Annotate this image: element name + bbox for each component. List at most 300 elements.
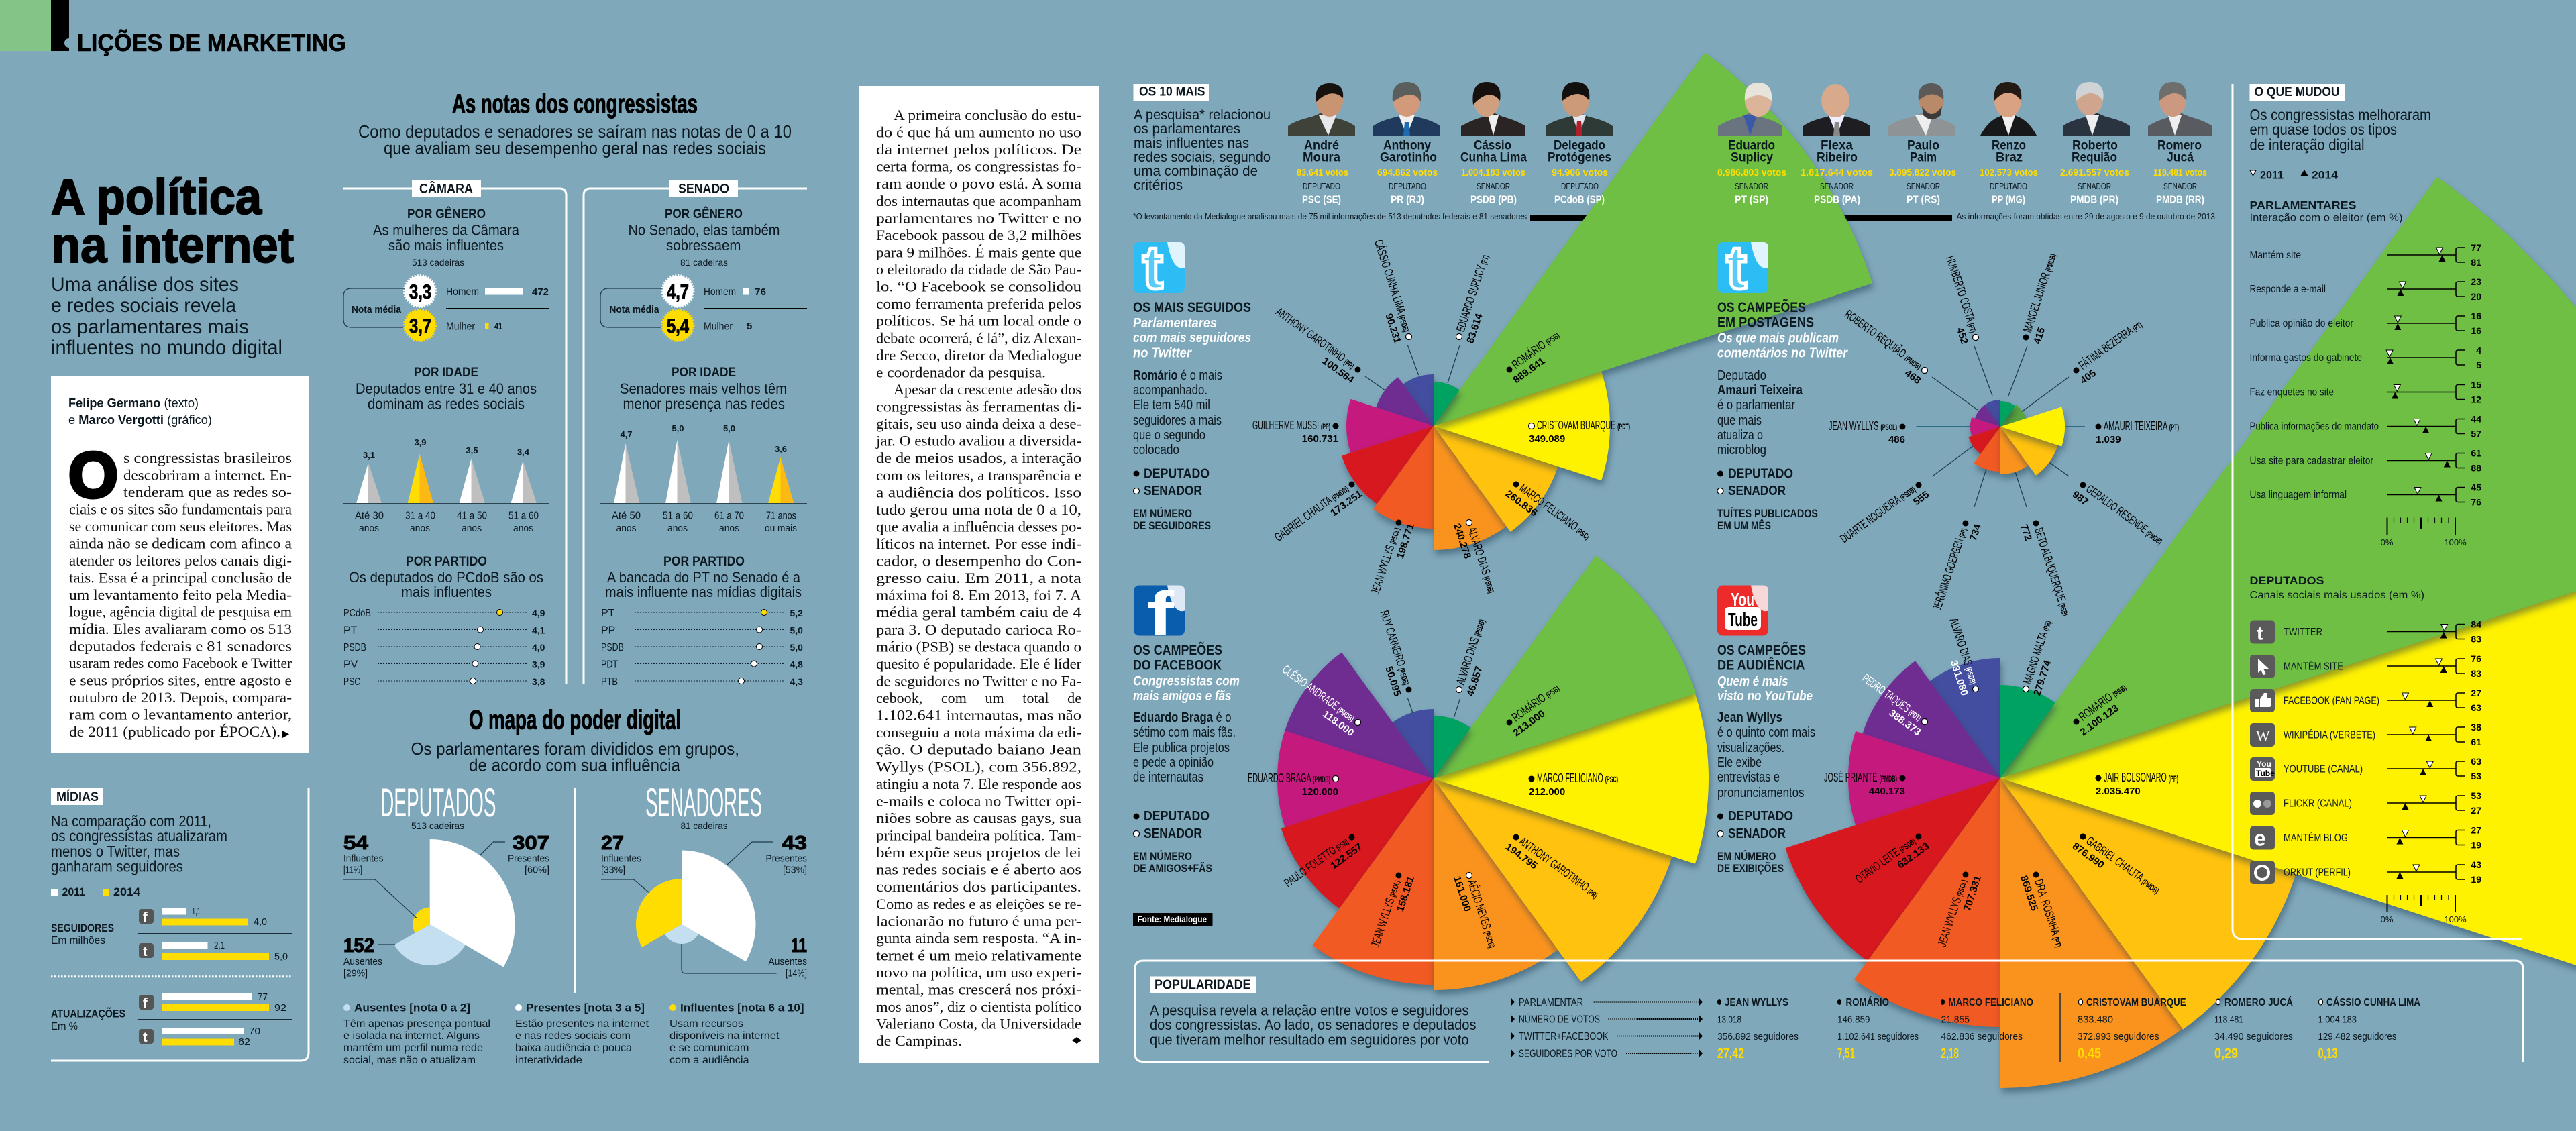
- photo: Flexa Ribeiro: [1803, 84, 1870, 136]
- triangle chart senado: 5,0: [672, 423, 684, 433]
- panel: body text column: cador, o desempenho do Con-: [876, 553, 1081, 570]
- pie labels: campeoes do facebook: ROMÁRIO (PSB): [1509, 681, 1562, 724]
- pie labels: campeoes de audiencia: 632.133: [1895, 841, 1931, 871]
- triangle chart camara: anos: [410, 523, 430, 534]
- range chart deputados: 83: [2471, 668, 2481, 679]
- description seguidos: acompanhado.: [1133, 383, 1208, 398]
- labels deputados: [60%]: [525, 864, 549, 876]
- pie labels: campeoes de audiencia: PEDRO TAQUES (PDT): [1860, 671, 1925, 724]
- name: Romero Juca: [2153, 138, 2207, 206]
- legend o que mudou: 2014: [2312, 169, 2339, 181]
- pie labels: campeoes de audiencia: 876.990: [2070, 841, 2106, 871]
- panel: body text column: mário (PSB) se destaca quando o: [876, 638, 1081, 655]
- triangle chart senado: 71 anos: [766, 510, 796, 522]
- heading deputados: Canais sociais mais usados (em %): [2250, 590, 2424, 601]
- panel: body text column: máxima foi 8. Em 2013, foi 7. A: [876, 587, 1081, 604]
- dot rows camara: PCdoB: [343, 608, 371, 619]
- table col: Jean Wyllys: 27,42: [1717, 1046, 1744, 1061]
- por genero camara: [343, 207, 549, 341]
- panel: body text column: da internet pelos políticos. De: [876, 141, 1081, 158]
- por genero camara: 513 cadeiras: [412, 257, 464, 268]
- table col: Cristovam Buarque: 372.993 seguidores: [2078, 1031, 2159, 1042]
- dot rows camara: PSC: [343, 676, 360, 688]
- por idade senado: menor presença nas redes: [623, 396, 785, 412]
- bar chart atualizacoes: Em %: [51, 1021, 78, 1032]
- legend facebook: DEPUTADO: [1144, 809, 1210, 824]
- por genero camara: 3,7: [409, 315, 431, 337]
- triangle chart senado: 5,0: [723, 423, 735, 433]
- name: Anthony Garotinho: PR (RJ): [1391, 195, 1424, 206]
- table col: Cristovam Buarque: 0,45: [2078, 1046, 2101, 1061]
- body text: ciais e os sites são fundamentais para: [69, 500, 292, 518]
- midias text: menos o Twitter, mas: [51, 843, 180, 860]
- pie labels: campeoes do facebook: 194.795: [1503, 841, 1540, 871]
- pie labels: os mais seguidos: 240.278: [1451, 522, 1473, 560]
- name: Roberto Requiao: Requião: [2072, 150, 2117, 165]
- bar chart seguidores: 1,1: [192, 906, 201, 917]
- dot rows camara: PV: [343, 659, 358, 671]
- pie senadores: [636, 851, 755, 961]
- triangle chart camara: anos: [359, 523, 379, 534]
- labels senadores: 11: [791, 935, 807, 957]
- labels deputados: Influentes: [343, 853, 384, 864]
- table col: Cassio Cunha Lima: 0,13: [2318, 1046, 2337, 1061]
- description seguidos: Ele tem 540 mil: [1133, 398, 1210, 413]
- por partido camara: POR PARTIDO: [406, 555, 487, 569]
- triangle chart camara: 51 a 60: [508, 510, 539, 522]
- name: Delegado Protogenes: [1548, 138, 1611, 206]
- panel: body text column: Apesar da crescente adesão dos: [894, 381, 1081, 398]
- triangle chart camara: 41 a 50: [457, 510, 487, 522]
- triangle chart senado: anos: [616, 523, 636, 534]
- panel: senado: [584, 180, 807, 688]
- table col: Cassio Cunha Lima: [2318, 995, 2420, 1061]
- pie labels: campeoes em postagens: 486: [1888, 434, 1905, 445]
- pie labels: os mais seguidos: CÁSSIO CUNHA LIMA (PSDB): [1372, 238, 1414, 333]
- pie labels: campeoes de audiencia: JAIR BOLSONARO (PP): [2104, 771, 2178, 784]
- heading postagens: [1717, 299, 1814, 330]
- dot rows senado: PDT: [601, 659, 618, 671]
- table col: Cristovam Buarque: CRISTOVAM BUARQUE: [2086, 997, 2186, 1008]
- description postagens: microblog: [1717, 443, 1766, 457]
- intro os 10 mais: mais influentes nas: [1134, 136, 1249, 151]
- pie labels: os mais seguidos: MARCO FELICIANO (PSC): [1517, 482, 1593, 542]
- legend audiencia: DEPUTADO: [1728, 809, 1793, 824]
- range chart deputados: 53: [2471, 790, 2481, 801]
- panel: body text column: comentários dos participantes.: [876, 878, 1081, 895]
- pie labels: campeoes do facebook: ANTHONY GAROTINHO (PR): [1517, 834, 1601, 901]
- pie labels: campeoes de audiencia: 388.373: [1886, 708, 1923, 738]
- pie labels: campeoes do facebook: 118.000: [1320, 708, 1356, 739]
- panel: body text column: mos anos”, diz o cientista político: [876, 998, 1081, 1015]
- range chart parlamentares: Responde a e-mail: [2250, 284, 2326, 295]
- panel: body text column: de de meios usados, a interação: [876, 449, 1081, 466]
- panel text: campeoes em postagens: [1717, 233, 1848, 532]
- pie labels: campeoes em postagens: 1.039: [2096, 434, 2121, 445]
- por genero senado: Nota média: [609, 304, 659, 315]
- pie labels: os mais seguidos: 160.731: [1302, 433, 1338, 445]
- name: Renzo Braz: PP (MG): [1992, 195, 2025, 206]
- legend: presentes: baixa audiência e pouca: [515, 1042, 632, 1054]
- por partido camara: [343, 555, 545, 688]
- subtitle: os parlamentares mais: [51, 316, 249, 338]
- legend: influentes: disponíveis na internet: [669, 1030, 780, 1042]
- o que mudou text: em quase todos os tipos: [2250, 121, 2397, 138]
- triangle chart camara: 3,5: [466, 445, 478, 455]
- footnote: As informações foram obtidas entre 29 de agosto e 9 de outubro de 2013: [1956, 211, 2215, 221]
- name: Renzo Braz: DEPUTADO: [1990, 181, 2027, 191]
- description postagens: [1717, 368, 1803, 457]
- panel: body text column: gunta ainda sem resposta. “A in-: [876, 930, 1081, 947]
- pie labels: os mais seguidos: [1252, 238, 1630, 600]
- range chart deputados: 19: [2471, 840, 2481, 851]
- heading: as notas dos congressistas: que avaliam seu desempenho geral nas redes sociais: [384, 138, 766, 158]
- subtitle facebook: Congressistas com: [1133, 674, 1240, 688]
- description facebook: sétimo com mais fãs.: [1133, 725, 1236, 740]
- bar chart atualizacoes: 92: [274, 1002, 286, 1014]
- por partido senado: A bancada do PT no Senado é a: [607, 569, 801, 586]
- subtitle facebook: [1133, 674, 1240, 704]
- heading: o mapa do poder digital: O mapa do poder digital: [469, 706, 681, 735]
- range chart parlamentares: Mantém site: [2250, 250, 2301, 261]
- pie labels: campeoes em postagens: 452: [1954, 326, 1970, 345]
- legend seguidos: DE SEGUIDORES: [1133, 519, 1211, 532]
- por genero camara: Nota média: [352, 304, 402, 315]
- legend audiencia: [1717, 809, 1793, 875]
- panel: body text column: dre Secco, diretor da Medialogue: [876, 347, 1081, 364]
- pie labels: campeoes do facebook: ALVARO DIAS (PSDB): [1454, 617, 1488, 686]
- por genero senado: No Senado, elas também: [628, 221, 780, 239]
- bar chart atualizacoes: 77: [258, 991, 268, 1003]
- tag o que mudou: O QUE MUDOU: [2254, 85, 2340, 99]
- panel: body text column: bém expõe seus projetos de lei: [876, 844, 1081, 861]
- body text: um levantamento feito pela Media-: [69, 586, 292, 603]
- range chart parlamentares: Publica opinião do eleitor: [2250, 318, 2354, 329]
- bar chart seguidores: f: [143, 910, 148, 925]
- intro os 10 mais: redes sociais, segundo: [1134, 150, 1271, 165]
- body text: logue, agência digital de pesquisa em: [69, 604, 292, 620]
- intro os 10 mais: [1134, 107, 1271, 193]
- por genero camara: são mais influentes: [388, 237, 504, 254]
- heading facebook: [1133, 642, 1222, 674]
- triangle chart senado: 4,7: [620, 429, 633, 439]
- pie labels: campeoes do facebook: 161.000: [1451, 875, 1473, 913]
- pie labels: campeoes do facebook: [1248, 609, 1618, 953]
- icon: facebook: f: [1147, 580, 1174, 648]
- pie labels: os mais seguidos: 90.231: [1383, 312, 1403, 345]
- labels deputados: [11%]: [343, 864, 362, 876]
- por genero camara: 3,3: [409, 281, 431, 303]
- dot rows senado: 5,2: [790, 608, 803, 618]
- triangle chart senado: [600, 423, 807, 534]
- photo: Anthony Garotinho: [1373, 82, 1440, 136]
- o que mudou text: Os congressistas melhoraram: [2250, 106, 2431, 123]
- name: Romero Juca: Romero: [2157, 138, 2202, 153]
- panel: body text column: debate ocorrerá, é lá”, diz Alexan-: [876, 329, 1081, 346]
- name: Renzo Braz: Braz: [1996, 150, 2023, 165]
- pie labels: campeoes em postagens: 405: [2078, 368, 2098, 386]
- range chart deputados: WIKIPÉDIA (VERBETE): [2284, 729, 2375, 741]
- range chart deputados: 61: [2471, 737, 2481, 747]
- pie labels: os mais seguidos: ROMÁRIO (PSB): [1509, 328, 1562, 372]
- pie labels: campeoes de audiencia: 2.100.123: [2078, 702, 2121, 738]
- panel: body text column: nas redes sociais e é aberto aos: [876, 861, 1081, 878]
- subtitle audiencia: [1717, 674, 1813, 704]
- panel: midias: [51, 788, 309, 1061]
- panel: body text column: Valeriano Costa, da Universidade: [876, 1016, 1081, 1032]
- panel: body text column: dos internautas que acompanham: [876, 193, 1081, 209]
- por partido senado: POR PARTIDO: [663, 555, 745, 569]
- heading: as notas dos congressistas: [358, 89, 792, 158]
- panel: body text column: como ferramenta preferida pelos: [876, 295, 1081, 312]
- name: Renzo Braz: [1980, 138, 2038, 206]
- bar chart atualizacoes: f: [143, 996, 148, 1011]
- dot rows camara: 4,9: [532, 608, 545, 618]
- table col: Marco Feliciano: MARCO FELICIANO: [1948, 997, 2033, 1008]
- panel: camara: [343, 180, 566, 688]
- midias legend: 2011: [62, 885, 85, 898]
- pie labels: campeoes do facebook: 50.095: [1383, 665, 1403, 698]
- range chart parlamentares: 15: [2471, 380, 2481, 390]
- legend audiencia: SENADOR: [1728, 826, 1786, 841]
- legend facebook: EM NÚMERO: [1133, 850, 1192, 863]
- dot rows camara: 3,9: [532, 659, 545, 669]
- range chart parlamentares: Publica informações do mandato: [2250, 421, 2379, 432]
- range chart deputados: e: [2254, 826, 2266, 851]
- icon: youtube: [1717, 585, 1768, 636]
- table col: Jean Wyllys: 356.892 seguidores: [1717, 1031, 1799, 1042]
- range chart deputados: 43: [2471, 859, 2481, 870]
- pie labels: campeoes de audiencia: 440.173: [1869, 786, 1905, 797]
- labels senadores: Influentes: [601, 853, 641, 864]
- name: Cassio Cunha Lima: [1460, 138, 1527, 206]
- table row labels: PARLAMENTAR: [1519, 997, 1583, 1008]
- legend: ausentes: Têm apenas presença pontual: [343, 1018, 490, 1030]
- subtitle: influentes no mundo digital: [51, 337, 282, 359]
- table col: Romario: 1.102.641 seguidores: [1837, 1031, 1919, 1042]
- pie labels: campeoes do facebook: 46.857: [1464, 665, 1485, 698]
- bar chart atualizacoes: ATUALIZAÇÕES: [51, 1006, 125, 1020]
- pie labels: campeoes em postagens: HUMBERTO COSTA (PT): [1943, 254, 1981, 334]
- panel: intro text: [51, 376, 309, 753]
- range chart deputados: W: [2256, 727, 2270, 744]
- name: Delegado Protogenes: Delegado: [1554, 138, 1605, 153]
- pie labels: campeoes em postagens: 772: [2018, 523, 2034, 542]
- footnote: *O levantamento da Medialogue analisou mais de 75 mil informações de 513 deputados federais e 81 senadores: [1133, 211, 1527, 221]
- pie labels: campeoes do facebook: AÉCIO NEVES (PSDB): [1465, 878, 1499, 949]
- labels deputados: Ausentes: [343, 956, 382, 967]
- range chart parlamentares: 81: [2471, 257, 2481, 268]
- range chart deputados: MANTÉM BLOG: [2284, 831, 2348, 844]
- por genero camara: Mulher: [446, 321, 476, 333]
- range chart parlamentares: 61: [2471, 448, 2481, 459]
- heading audiencia: OS CAMPEÕES: [1717, 642, 1806, 658]
- table col: Romario: ROMÁRIO: [1846, 995, 1889, 1008]
- popularidade text: [1150, 1002, 1476, 1048]
- title: [51, 169, 294, 273]
- pie labels: os mais seguidos: 349.089: [1529, 433, 1565, 445]
- pie labels: os mais seguidos: 83.614: [1464, 312, 1485, 345]
- legend facebook: DE AMIGOS+FÃS: [1133, 861, 1212, 875]
- triangle chart senado: 3,6: [775, 444, 787, 454]
- dot rows senado: 4,3: [790, 676, 803, 687]
- body text: outubro de 2013. Depois, compara-: [69, 689, 292, 706]
- range chart deputados: 19: [2471, 874, 2481, 885]
- legend: ausentes: [343, 1001, 490, 1066]
- range chart parlamentares: 44: [2471, 413, 2481, 424]
- icon: twitter 2: t: [1726, 233, 1747, 302]
- panel: body text column: tudo gerou uma nota de 0 a 10,: [876, 501, 1081, 518]
- pie chart: os mais seguidos: [1331, 52, 1925, 586]
- description facebook: Eduardo Braga é o: [1133, 710, 1232, 725]
- legend seguidos: [1133, 467, 1211, 532]
- subtitle seguidos: com mais seguidores: [1133, 331, 1251, 345]
- name: Paulo Paim: PT (RS): [1907, 195, 1940, 206]
- legend: presentes: e nas redes sociais com: [515, 1030, 631, 1042]
- body text: descobriram a internet. En-: [123, 467, 292, 483]
- dot rows camara: 4,1: [532, 625, 545, 636]
- table col: Romero Juca: [2214, 995, 2293, 1061]
- dot rows camara: [343, 608, 545, 688]
- subtitle postagens: [1717, 331, 1848, 361]
- labels senadores: Ausentes: [769, 956, 807, 967]
- dot rows camara: 4,0: [532, 642, 545, 653]
- popularidade text: A pesquisa revela a relação entre votos e seguidores: [1150, 1002, 1469, 1018]
- triangle chart senado: anos: [667, 523, 688, 534]
- name: Paulo Paim: Paim: [1910, 150, 1937, 165]
- table col: Jean Wyllys: JEAN WYLLYS: [1725, 997, 1788, 1008]
- byline: [68, 396, 212, 427]
- range chart parlamentares: Usa site para cadastrar eleitor: [2250, 455, 2374, 467]
- panel: body text column: gresso caiu. Em 2011, a nota: [876, 570, 1081, 586]
- midias legend: 2014: [113, 885, 141, 898]
- description seguidos: [1133, 368, 1222, 457]
- legend: ausentes: e isolada na internet. Alguns: [343, 1030, 480, 1042]
- range chart deputados: 84: [2471, 618, 2481, 629]
- triangle chart senado: ou mais: [765, 523, 797, 534]
- description facebook: de internautas: [1133, 770, 1203, 785]
- dot rows camara: 3,8: [532, 676, 545, 687]
- legend: presentes: [515, 1001, 649, 1066]
- legend: influentes: e se comunicam: [669, 1042, 749, 1054]
- panel text: os mais seguidos: OS MAIS SEGUIDOS: [1133, 300, 1251, 315]
- heading postagens: OS CAMPEÕES: [1717, 299, 1806, 315]
- description postagens: Deputado: [1717, 368, 1766, 383]
- panel: os 10 mais: [1133, 82, 2215, 221]
- legend seguidos: DEPUTADO: [1144, 467, 1210, 482]
- legend: influentes: Usam recursos: [669, 1018, 743, 1030]
- name: Eduardo Suplicy: Suplicy: [1731, 150, 1773, 165]
- pie labels: campeoes do facebook: MARCO FELICIANO (PSC): [1537, 771, 1618, 785]
- heading deputados: DEPUTADOS: [2250, 574, 2324, 587]
- name: Anthony Garotinho: [1377, 138, 1438, 206]
- labels senadores: [601, 832, 807, 979]
- section header: LIÇÕES DE MARKETING: [77, 28, 346, 56]
- body text: deputados federais e 81 senadores: [69, 637, 292, 655]
- pie labels: campeoes de audiencia: 331.080: [1948, 659, 1970, 697]
- name: Paulo Paim: SENADOR: [1907, 181, 1940, 191]
- icon: twitter 2: [1717, 233, 1768, 302]
- panel: body text column: mental, mas crescerá nos próxi-: [876, 981, 1081, 998]
- heading: o mapa do poder digital: Os parlamentares foram divididos em grupos,: [411, 739, 739, 759]
- name: Andre Moura: Moura: [1303, 150, 1340, 165]
- subtitle: [51, 274, 282, 359]
- subtitle postagens: comentários no Twitter: [1717, 346, 1848, 361]
- panel: body text column: niões sobre as causas gays, sua: [876, 810, 1081, 826]
- range chart deputados: FACEBOOK (FAN PAGE): [2284, 695, 2379, 707]
- legend postagens: EM UM MÊS: [1717, 519, 1771, 532]
- pie labels: campeoes do facebook: 158.181: [1395, 875, 1417, 913]
- pie labels: os mais seguidos: JEAN WYLLYS (PSOL): [1368, 525, 1403, 596]
- pie labels: os mais seguidos: 198.771: [1395, 522, 1417, 560]
- name: Anthony Garotinho: 694.862 votos: [1377, 167, 1438, 178]
- body text: se comunicar com seus eleitores. Mas: [69, 518, 292, 535]
- table row labels: NÚMERO DE VOTOS: [1519, 1013, 1600, 1025]
- pie labels: os mais seguidos: EDUARDO SUPLICY (PT): [1454, 253, 1491, 333]
- dot rows senado: PTB: [601, 676, 618, 688]
- subtitle: e redes sociais revela: [51, 294, 236, 317]
- range chart deputados: YOUTUBE (CANAL): [2284, 763, 2363, 775]
- name: Eduardo Suplicy: SENADOR: [1735, 181, 1768, 191]
- dot rows senado: 5,0: [790, 642, 803, 653]
- table col: Cassio Cunha Lima: 1.004.183: [2318, 1014, 2357, 1025]
- pie labels: os mais seguidos: 889.641: [1511, 356, 1548, 386]
- subtitle facebook: mais amigos e fãs: [1133, 689, 1232, 704]
- range chart parlamentares: 0%: [2381, 537, 2394, 547]
- pie labels: campeoes em postagens: DUARTE NOGUEIRA (PSDB): [1837, 482, 1918, 545]
- legend o que mudou: [2250, 169, 2339, 181]
- labels deputados: Presentes: [508, 853, 549, 864]
- description postagens: Amauri Teixeira: [1717, 383, 1803, 398]
- panel: mapa deputados: 513 cadeiras: [411, 820, 464, 831]
- range chart parlamentares: Faz enquetes no site: [2250, 386, 2334, 398]
- table col: Marco Feliciano: 21.855: [1941, 1014, 1970, 1025]
- name: Anthony Garotinho: Anthony: [1383, 138, 1431, 153]
- range chart deputados: 83: [2471, 633, 2481, 644]
- range chart deputados: You: [2257, 759, 2271, 769]
- range chart parlamentares: 20: [2471, 291, 2481, 302]
- name: Andre Moura: DEPUTADO: [1303, 181, 1340, 191]
- heading: as notas dos congressistas: As notas dos congressistas: [452, 89, 698, 119]
- name: Roberto Requiao: Roberto: [2072, 138, 2118, 153]
- legend seguidos: EM NÚMERO: [1133, 507, 1192, 520]
- intro os 10 mais: A pesquisa* relacionou: [1134, 107, 1271, 123]
- heading facebook: OS CAMPEÕES: [1133, 642, 1222, 658]
- description seguidos: colocado: [1133, 443, 1179, 457]
- pie labels: campeoes em postagens: AMAURI TEIXEIRA (PT): [2104, 419, 2179, 433]
- subtitle seguidos: [1133, 316, 1251, 361]
- legend facebook: [1133, 809, 1212, 875]
- labels senadores: Presentes: [766, 853, 807, 864]
- panel: body text column: do é que há um aumento no uso: [876, 124, 1081, 141]
- triangle chart camara: [343, 437, 549, 534]
- panel: body text column: conseguiu a nota máxima da edi-: [876, 724, 1081, 741]
- name: Paulo Paim: 3.895.822 votos: [1889, 167, 1956, 178]
- range chart deputados: t: [2257, 623, 2263, 644]
- pie labels: campeoes do facebook: 120.000: [1302, 786, 1338, 798]
- table col: Romario: [1837, 995, 1919, 1061]
- photo: Romero Juca: [2148, 82, 2212, 136]
- name: Andre Moura: PSC (SE): [1302, 195, 1341, 206]
- name: Flexa Ribeiro: Flexa: [1821, 138, 1853, 153]
- pie labels: campeoes do facebook: EDUARDO BRAGA (PMDB): [1248, 771, 1330, 785]
- legend postagens: TUÍTES PUBLICADOS: [1717, 507, 1818, 520]
- name: Romero Juca: SENADOR: [2163, 181, 2197, 191]
- panel: mapa senadores: SENADORES: [645, 780, 762, 825]
- dot rows senado: 4,8: [790, 659, 803, 669]
- por idade camara: Deputados entre 31 e 40 anos: [356, 380, 537, 397]
- triangle chart camara: 31 a 40: [405, 510, 435, 522]
